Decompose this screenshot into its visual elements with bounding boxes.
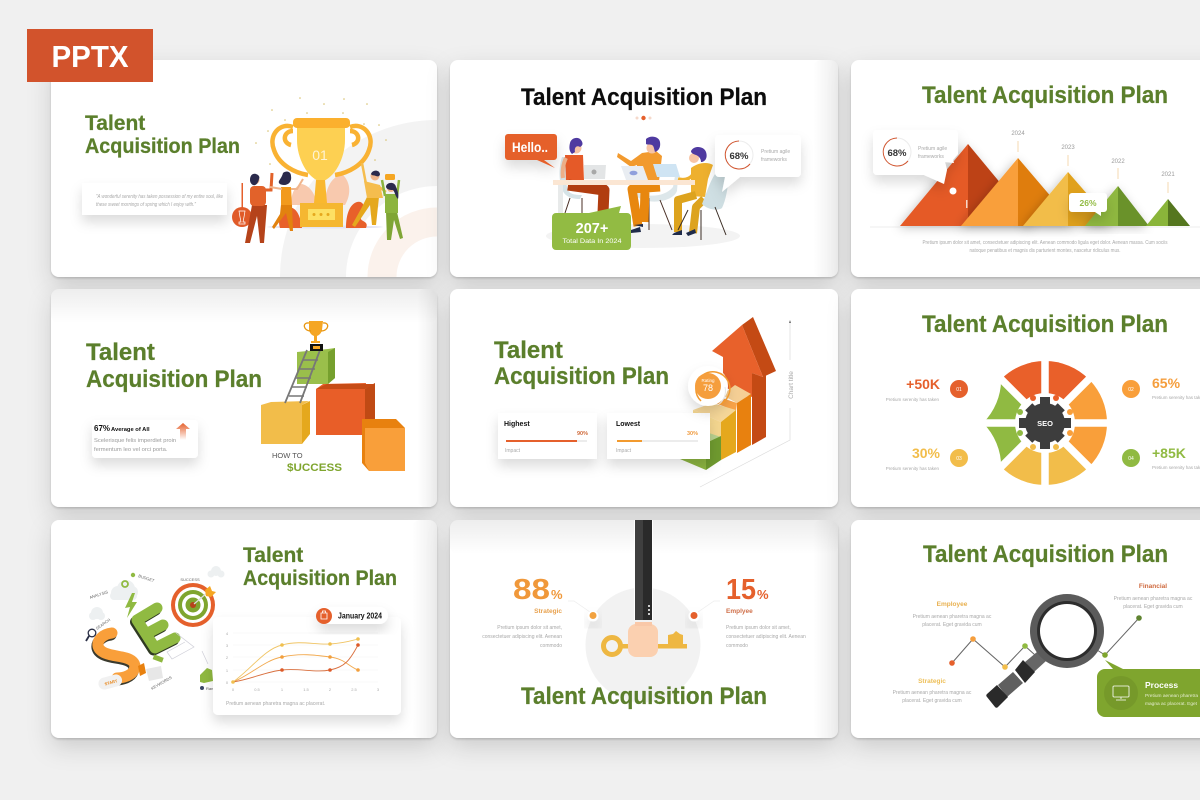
quote card: "A wonderful serenity has taken possession of my entire soul, like: [96, 194, 223, 200]
label: employee: Pretium aenean pharetra magna ac: [913, 614, 992, 620]
chart card: line chart: 1.5: [303, 687, 310, 692]
chart card: line chart: 2.5: [351, 687, 358, 692]
heading: slide 4 title: Acquisition Plan: [86, 366, 262, 393]
callout: 68% ring: Pretium agile: [761, 149, 790, 155]
illustration: SEO letters and target: Rank: [206, 686, 215, 691]
heading: slide 8 title: Talent Acquisition Plan: [521, 683, 767, 710]
stat: 15% employee: consectetuer adipiscing elit. Aenean: [726, 634, 806, 640]
connector: employee: [688, 601, 720, 622]
slide 4: how to success: [51, 289, 437, 507]
card: highest: Impact: [505, 448, 521, 454]
pill: January 2024: January 2024: [338, 612, 382, 620]
stat: 15% employee: 15: [726, 574, 756, 606]
card: lowest: Lowest: [616, 421, 641, 428]
label: financial: Pretium aenean pharetra magna ac: [1114, 596, 1193, 602]
stat: 65%: 65%: [1152, 375, 1181, 391]
chart card: line chart: 0.5: [254, 687, 261, 692]
chart: eight-segment wheel with SEO gear: SEO: [1037, 419, 1053, 428]
illustration: SEO letters and target: SEARCH: [95, 617, 111, 631]
heading: slide 6 title: Talent Acquisition Plan: [922, 311, 1168, 338]
slide 1: title with trophy: [43, 60, 445, 289]
quote card: [82, 183, 227, 215]
label: financial: [1114, 583, 1193, 610]
callout: 68% ring: [873, 130, 958, 184]
stat: 15% employee: [726, 574, 806, 649]
illustration: SEO letters and target: BUDGET: [138, 573, 156, 583]
stat: 88% strategic: %: [551, 587, 563, 602]
illustration: team at table: [546, 137, 740, 248]
callout: 68% ring: [715, 135, 801, 192]
card: lowest: 30%: [687, 431, 698, 437]
callout: 68% ring: 68%: [887, 148, 907, 159]
card: highest: 90%: [577, 431, 588, 437]
stat: 88% strategic: Strategic: [534, 608, 562, 615]
callout: 207+ total data: [552, 206, 631, 250]
label: employee: placerat. Eget gravida cum: [922, 622, 982, 628]
chart: pyramids by year: 2024: [1011, 131, 1025, 137]
label: financial: placerat. Eget gravida cum: [1123, 604, 1183, 610]
stat card: 67%: fermentum leo vel orci porta.: [94, 447, 168, 453]
card: lowest: Impact: [616, 448, 632, 454]
pagination dots: [636, 116, 652, 120]
stat: +85K: [1122, 445, 1200, 470]
label: employee: [913, 601, 992, 628]
marker dot: [950, 188, 956, 194]
stat: +50K: +50K: [906, 376, 940, 392]
callout: 68% ring: frameworks: [918, 154, 944, 160]
heading: slide 3 title: Talent Acquisition Plan: [922, 82, 1168, 109]
label: strategic: [893, 678, 972, 704]
pill: January 2024: [316, 607, 388, 624]
chart: axis with chart title: Chart title: [788, 371, 795, 399]
chart card: line chart: 0: [226, 680, 229, 685]
illustration: SEO letters and target: ANALYSIS: [89, 589, 109, 600]
stat: 88% strategic: 88: [513, 574, 550, 606]
callout: 26%: [1069, 193, 1107, 216]
chart card: line chart: 1: [226, 668, 229, 673]
heading: slide 1 title: Acquisition Plan: [85, 135, 240, 158]
speech bubble: Hello: [505, 134, 557, 168]
label: strategic: Pretium aenean pharetra magna ac: [893, 690, 972, 696]
quote card: these sweet mornings of spring which I enjoy with.": [96, 202, 196, 208]
heading: slide 1 title: Talent: [85, 112, 145, 135]
chart card: line chart: Pretium aenean pharetra magna ac placerat.: [226, 701, 325, 707]
chart card: line chart: 0: [232, 687, 235, 692]
callout: process: Process: [1145, 680, 1178, 690]
heading: slide 5 title: Talent: [494, 337, 563, 364]
badge: rating 78: [688, 366, 730, 406]
chart: pyramids by year: 2022: [1111, 159, 1125, 165]
heading: slide 7 title: Talent: [243, 544, 303, 567]
stat: 88% strategic: consectetuer adipiscing elit. Aenean: [482, 634, 562, 640]
chart: eight-segment wheel with SEO gear: [977, 355, 1113, 491]
stat: 65%: 02: [1128, 387, 1134, 393]
stat: 15% employee: commodo: [726, 643, 748, 649]
label: employee: Employee: [937, 601, 968, 608]
illustration: hand holding key: [586, 520, 700, 702]
stat: +50K: 01: [956, 387, 962, 393]
stat: +50K: Pretium serenity has taken: [886, 397, 939, 402]
chart: 3D rising arrow columns: [680, 317, 776, 470]
illustration: SEO letters and target: KEYWORDS: [150, 675, 173, 691]
badge: PPTX: [27, 29, 153, 82]
stat card: 67%: Scelerisque felis imperdiet proin: [94, 438, 176, 444]
label: how to success: HOW TO: [272, 451, 303, 460]
stat: 88% strategic: Pretium ipsum dolor sit amet,: [497, 625, 562, 631]
card: highest: Highest: [504, 421, 530, 428]
callout: 68% ring: 68%: [729, 151, 749, 162]
callout: 68% ring: frameworks: [761, 157, 787, 163]
callout: 207+ total data: Total Data In 2024: [562, 238, 622, 245]
label: how to success: $UCCESS: [287, 462, 342, 474]
badge: rating 78: Rating: [701, 378, 715, 383]
stat: +50K: [886, 376, 968, 402]
body text: natoque penatibus et magnis dis parturient montes, nascetur ridiculus mus.: [970, 248, 1120, 254]
stat: +85K: 04: [1128, 456, 1134, 462]
slide 8: hand with key: [450, 520, 838, 738]
stat: 30%: 30%: [912, 445, 941, 461]
illustration: trophy and team: [232, 97, 403, 243]
stat: 15% employee: Pretium ipsum dolor sit amet,: [726, 625, 791, 631]
label: strategic: Strategic: [918, 678, 946, 685]
chart card: line chart: 2: [329, 687, 332, 692]
stat: +85K: +85K: [1152, 445, 1186, 461]
heading: slide 7 title: Acquisition Plan: [243, 567, 397, 590]
slide 3: pyramid timeline: [851, 60, 1200, 277]
icon: magnifying glass: [986, 594, 1104, 708]
chart: pyramids by year: 2021: [1161, 172, 1175, 178]
badge: PPTX: PPTX: [52, 39, 129, 74]
callout: 26%: 26%: [1079, 198, 1097, 208]
slide 7: SEO with line chart: [51, 520, 437, 738]
badge: rating 78: 78: [703, 383, 713, 393]
chart: line through magnifier: [949, 615, 1142, 670]
body text: Pretium ipsum dolor sit amet, consectetuer adipiscing elit. Aenean commodo ligula eget dolor. Aenean massa. Cum sociis: [922, 240, 1168, 246]
heading: slide 5 title: Acquisition Plan: [494, 363, 669, 390]
chart card: line chart: 3: [226, 643, 229, 648]
illustration: trophy and team: 01: [312, 147, 328, 163]
speech bubble: Hello: Hello..: [512, 140, 548, 155]
heading: slide 9 title: Talent Acquisition Plan: [923, 541, 1168, 568]
card: lowest: [607, 413, 710, 459]
chart card: line chart: [213, 617, 401, 715]
stat: 65%: [1122, 375, 1200, 400]
chart: axis with chart title: [700, 320, 795, 487]
illustration: SEO letters and target: SUCCESS: [180, 577, 200, 582]
slide 9: magnifier: [851, 520, 1200, 738]
chart card: line chart: 3: [377, 687, 380, 692]
label: financial: Financial: [1139, 583, 1167, 590]
chart: pyramids by year: [870, 131, 1200, 227]
illustration: SEO letters and target: START: [104, 678, 118, 686]
stat card: 67%: 67%Average of All: [94, 424, 150, 433]
stat: 88% strategic: [482, 574, 563, 649]
callout: 207+ total data: 207+: [576, 221, 608, 237]
chart card: line chart: 2: [226, 655, 229, 660]
stat: 30%: Pretium serenity has taken: [886, 466, 939, 471]
chart: pyramids by year: 2023: [1061, 145, 1075, 151]
stat: 30%: 03: [956, 456, 962, 462]
heading: slide 2 title: Talent Acquisition Plan: [521, 84, 767, 111]
stat: 15% employee: %: [757, 587, 769, 602]
card: highest: [498, 413, 597, 459]
slide 5: rising chart: [450, 289, 838, 507]
illustration: SEO letters and target: [86, 566, 224, 691]
callout: process: magna ac placerat. Eget: [1145, 701, 1198, 707]
heading: slide 4 title: Talent: [86, 339, 155, 366]
label: how to success: [272, 451, 342, 474]
stat: 30%: [886, 445, 968, 471]
slide 2: team meeting: [450, 60, 838, 277]
illustration: cubes, ladder and trophy: [261, 321, 405, 471]
callout: process: [1097, 660, 1200, 717]
chart card: line chart: 4: [226, 631, 229, 636]
stat: 88% strategic: commodo: [540, 643, 562, 649]
stat: 15% employee: Emplyee: [726, 608, 753, 615]
connector: strategic: [568, 601, 598, 622]
callout: process: Pretium aenean pharetra: [1145, 693, 1198, 699]
callout: 68% ring: Pretium agile: [918, 146, 947, 152]
slide 6: SEO wheel: [851, 289, 1200, 507]
chart card: line chart: 1: [281, 687, 284, 692]
label: strategic: placerat. Eget gravida cum: [902, 698, 962, 704]
stat card: 67%: [92, 420, 198, 458]
